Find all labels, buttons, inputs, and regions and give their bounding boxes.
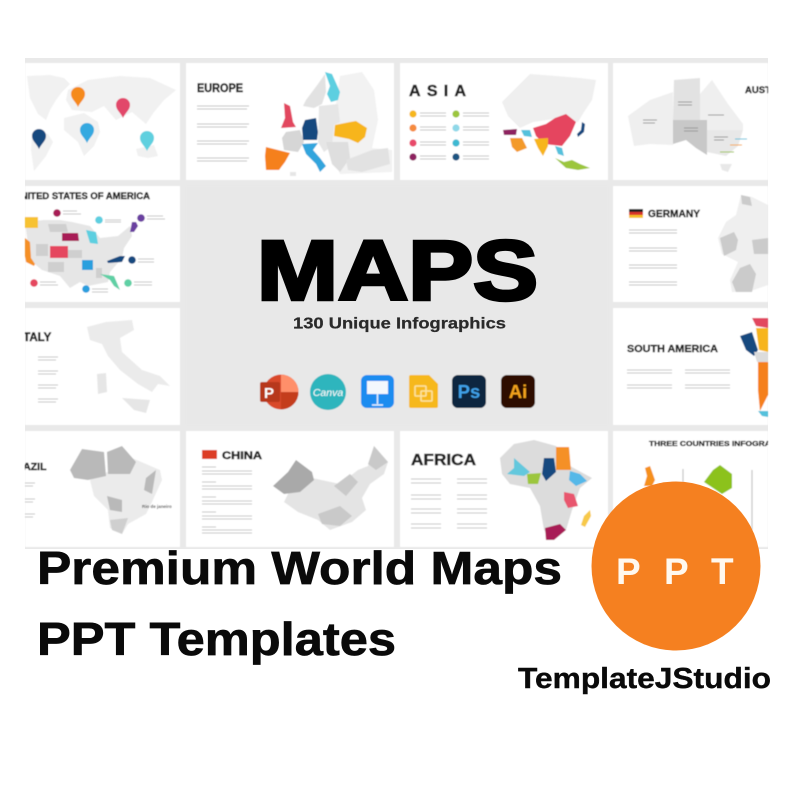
map: France (282, 130, 304, 152)
map: Xinjiang (273, 460, 314, 494)
panel: central title (186, 186, 608, 425)
map: Balkans (326, 142, 350, 172)
panel: Australia (613, 63, 769, 180)
map: India (534, 138, 548, 156)
map: Venezuela (752, 318, 768, 328)
icon: Illustrator: Ai (509, 381, 527, 402)
map: mainland (87, 320, 170, 392)
pin: navy (32, 129, 46, 149)
legend circles (409, 110, 460, 161)
map: Queensland (700, 80, 743, 130)
map: south (110, 518, 128, 534)
icon: Photoshop: Ps (458, 381, 480, 402)
icon: Canva: Canva (313, 387, 343, 399)
text block (411, 479, 487, 528)
badge: PPT: T (711, 551, 734, 592)
map: western regions (628, 92, 673, 146)
map: grey countries (500, 440, 592, 540)
heading: CHINA (222, 450, 262, 462)
map: Mali (507, 458, 530, 476)
legend text (420, 113, 489, 159)
flag (629, 209, 643, 218)
map: Sudan (542, 458, 556, 481)
panel: United States (14, 186, 180, 302)
map: Arkansas (82, 260, 93, 270)
map: Wisconsin (86, 230, 98, 244)
map: Russia and central Asia (502, 74, 596, 128)
map: south tip (758, 411, 768, 417)
panel: three countries (613, 431, 792, 547)
map: Italy (302, 143, 326, 172)
text block (202, 467, 252, 533)
map: Russia backdrop (330, 72, 392, 174)
map: California (25, 238, 35, 266)
main word: MAPS: MAPS (257, 224, 538, 318)
map: Germany (302, 118, 318, 140)
panel: Asia (400, 63, 608, 180)
pin: cyan (140, 131, 154, 151)
headline: Premium World Maps (37, 542, 562, 594)
heading: UNITED STATES OF AMERICA (14, 191, 151, 201)
map: New South Wales and Victoria (707, 130, 743, 172)
callout circles (30, 209, 145, 293)
flag (202, 450, 217, 459)
world land masses (27, 75, 176, 171)
icon: Canva (310, 374, 346, 410)
icon: Illustrator (501, 375, 535, 408)
badge: PPT: P (664, 551, 689, 592)
map: South Dakota (62, 233, 79, 241)
heading: GERMANY (648, 209, 700, 220)
map labels (643, 102, 728, 140)
heading: BRAZIL (8, 461, 47, 473)
map: Finland (325, 72, 340, 102)
panel: Africa (400, 431, 608, 547)
slide collage (8, 63, 794, 547)
pin: red (116, 98, 130, 118)
map: Ukraine (334, 121, 367, 143)
map: dark regions (70, 446, 156, 512)
map: Germany (704, 465, 732, 494)
map: Maine (130, 222, 138, 232)
map: darker regions (720, 195, 768, 292)
text block (25, 483, 35, 517)
map: Madagascar (581, 510, 591, 527)
panel: China (186, 431, 394, 547)
map: Chile and Argentina (758, 362, 768, 411)
map: North Carolina (107, 256, 125, 263)
text block (197, 106, 249, 161)
map: Japan (577, 122, 585, 137)
heading: SOUTH AMERICA (627, 344, 718, 355)
badge: PPT: P (616, 551, 641, 592)
map: Washington (25, 217, 38, 228)
callout text (40, 211, 165, 292)
map: Sicily (122, 398, 150, 413)
map: darker state tiles (36, 224, 102, 278)
divider lines (683, 469, 752, 530)
heading: AFRICA (411, 452, 476, 469)
text block (627, 370, 730, 388)
map: Colorado (50, 246, 68, 258)
map: central Europe (290, 104, 340, 176)
map: light regions (90, 458, 162, 534)
map: Nigeria (527, 473, 541, 484)
background collage (25, 58, 768, 549)
map: Turkey (503, 129, 517, 135)
map: UK (281, 103, 296, 128)
icon: Photoshop (452, 375, 486, 408)
icon: PowerPoint: P (264, 385, 274, 402)
map: grey states (25, 220, 132, 288)
pin: orange (71, 87, 85, 107)
panel: South America (613, 308, 768, 425)
heading: THREE COUNTRIES INFOGRAPHIC (649, 439, 792, 448)
map: Tanzania (564, 492, 578, 508)
icon: Keynote (361, 375, 394, 408)
map: Iran and Southeast Asia (521, 130, 564, 156)
map: China (533, 114, 576, 146)
icon: Google Slides (409, 375, 438, 408)
map: UK (644, 466, 655, 486)
map label: Rio de janeiro (142, 504, 172, 509)
heading: ITALY (20, 332, 52, 344)
map: South Africa (545, 524, 566, 540)
headline: PPT Templates (37, 613, 396, 665)
map: Florida (100, 274, 120, 290)
panel: world map (25, 63, 180, 180)
map: Bolivia and Brazil (756, 328, 768, 352)
panel: Italy (20, 308, 180, 425)
heading: ASIA (409, 83, 466, 100)
panel: Europe (186, 63, 394, 180)
panel: Germany (613, 186, 768, 302)
map: Egypt (556, 447, 571, 470)
brand name: TemplateJStudio (518, 663, 771, 695)
map: Saudi Arabia (510, 138, 527, 152)
map: darker regions (318, 446, 388, 526)
map: Scandinavia (303, 74, 326, 108)
text block (629, 230, 677, 285)
panel: Brazil (8, 431, 180, 547)
map: Peru (740, 332, 758, 356)
map: northern territory (673, 78, 700, 120)
map: Ethiopia (569, 471, 587, 486)
map: Sardinia (97, 373, 107, 394)
subtitle: 130 Unique Infographics (293, 316, 506, 332)
text block (38, 357, 58, 402)
map: Spain (265, 147, 290, 170)
map: Turkey (346, 148, 390, 172)
pin: blue (80, 123, 94, 143)
headline (37, 542, 562, 665)
map: Indonesia (555, 158, 590, 170)
map: light regions (284, 446, 388, 530)
badge: PPT (592, 482, 760, 650)
map: South Australia (673, 120, 707, 155)
map (718, 195, 768, 292)
icon: PowerPoint (260, 374, 298, 410)
heading: EUROPE (197, 83, 243, 95)
map: grey (754, 352, 768, 362)
